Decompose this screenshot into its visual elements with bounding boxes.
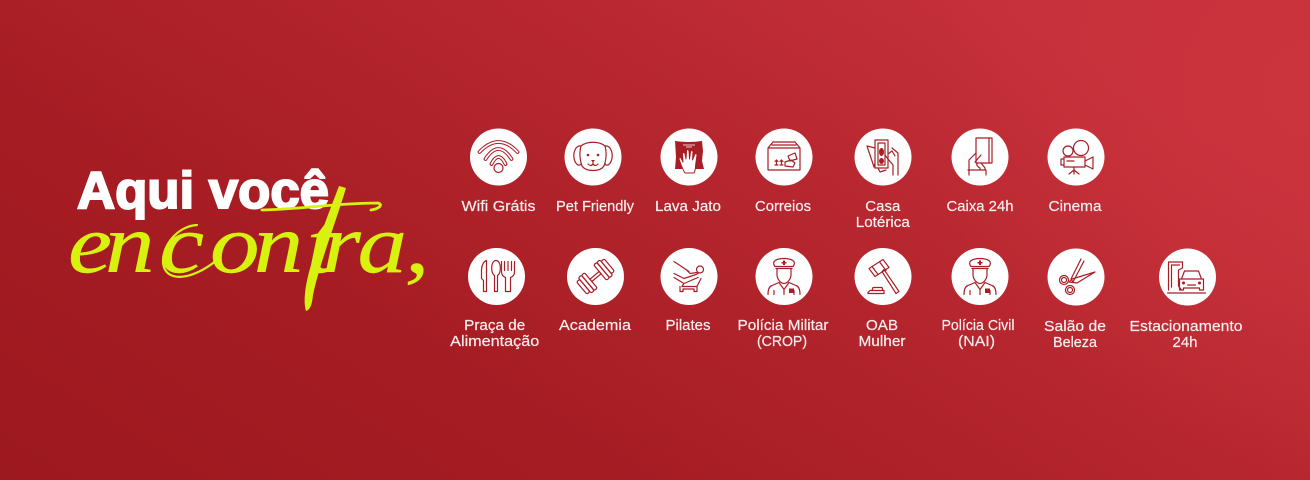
label: Pet Friendly <box>556 198 634 215</box>
item: Cinema <box>1048 128 1104 215</box>
circle <box>660 128 718 186</box>
label: Academia <box>559 317 632 334</box>
circle <box>470 128 527 186</box>
label: Salão de <box>1044 318 1106 335</box>
label: Polícia Militar <box>738 317 829 334</box>
label: Wifi Grátis <box>462 198 536 215</box>
label: Praça de <box>464 317 525 334</box>
item: Caixa 24h <box>946 128 1014 215</box>
item: OAB Mulher <box>854 248 912 350</box>
label: Lotérica <box>856 214 910 231</box>
circle <box>854 128 912 186</box>
item: Casa Lotérica <box>854 128 912 231</box>
label: Pilates <box>666 317 710 334</box>
item: Wifi Grátis <box>462 128 536 215</box>
icon: cutlery <box>482 260 514 292</box>
label: Mulher <box>858 333 906 350</box>
label: Lava Jato <box>655 198 721 215</box>
icon: wifi <box>480 142 518 172</box>
circle <box>468 248 525 305</box>
icon: dumbbell <box>575 257 616 296</box>
item: Correios <box>755 128 812 215</box>
label: Casa <box>865 198 901 215</box>
label: OAB <box>866 317 898 334</box>
item: Pet Friendly <box>556 128 634 215</box>
item: Polícia Civil <box>942 248 1014 350</box>
item: Estacionamento 24h <box>1130 248 1242 351</box>
circle <box>952 248 1008 305</box>
label: Beleza <box>1053 334 1098 351</box>
circle <box>756 248 812 305</box>
item: Polícia Militar <box>738 248 829 350</box>
label: Correios <box>755 198 811 215</box>
icon: car in garage <box>1168 262 1206 293</box>
label: Polícia Civil <box>942 317 1014 334</box>
icon: pilates machine <box>674 262 704 292</box>
item: Praça de Alimentação <box>450 248 539 350</box>
heading: encontra script: encontra, <box>68 197 430 290</box>
item: Salão de Beleza <box>1044 248 1106 351</box>
circle <box>1048 248 1104 306</box>
icon: hand with card <box>968 138 992 175</box>
icon: parcel <box>768 142 800 170</box>
label: Cinema <box>1048 198 1102 215</box>
icon: military police officer <box>768 258 800 294</box>
label: (CROP) <box>757 333 807 350</box>
circle <box>567 248 624 305</box>
icon: gavel <box>868 260 899 294</box>
circle <box>1048 128 1104 186</box>
icon: civil police officer <box>964 258 996 294</box>
title <box>68 162 430 311</box>
label: Caixa 24h <box>946 198 1014 215</box>
swash: connecting strokes and t stem <box>163 186 380 311</box>
circle <box>564 128 622 186</box>
icon: hand on cloth <box>675 141 704 173</box>
icon: scissors <box>1060 259 1095 294</box>
icon: film camera <box>1061 140 1093 174</box>
label: (NAI) <box>958 333 995 350</box>
icon: banknotes in hand <box>867 140 898 175</box>
circle <box>756 128 812 186</box>
circle <box>854 248 912 305</box>
item: Pilates <box>660 248 718 334</box>
circle <box>660 248 718 305</box>
icon: dog face <box>574 142 612 170</box>
circle <box>952 128 1008 186</box>
heading: Aqui você: Aqui você <box>77 162 329 220</box>
label: Estacionamento <box>1130 318 1242 335</box>
item: Academia <box>559 248 632 334</box>
label: Alimentação <box>450 333 539 350</box>
label: 24h <box>1172 334 1198 351</box>
item: Lava Jato <box>655 128 721 215</box>
circle <box>1159 248 1216 306</box>
